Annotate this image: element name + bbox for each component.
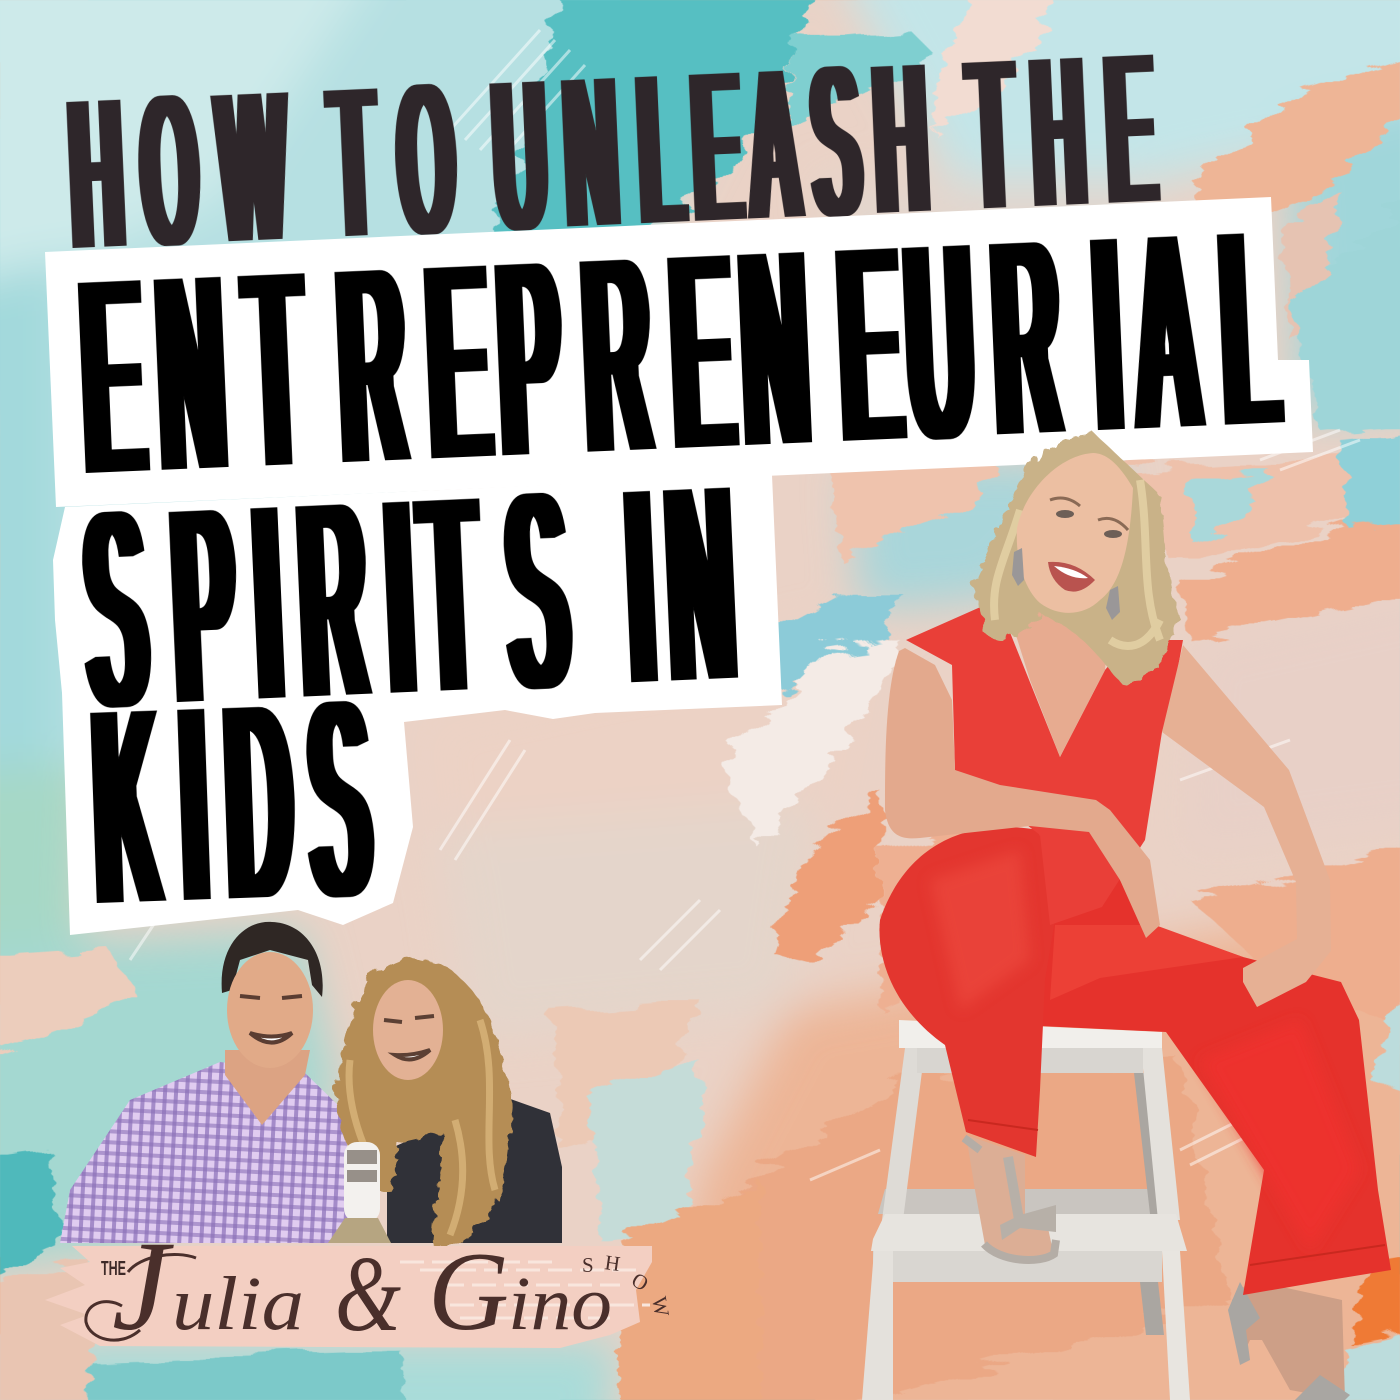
logo word: show: H xyxy=(603,1250,622,1276)
facial features xyxy=(1012,498,1128,620)
title line: how to unleash the: HOW TO UNLEASH THE xyxy=(65,3,1160,300)
red jumpsuit top xyxy=(906,605,1183,925)
logo flourish xyxy=(86,1254,196,1340)
logo word: julia: J xyxy=(112,1215,174,1357)
woman features xyxy=(384,1016,434,1059)
logo word: ampersand: & xyxy=(335,1235,401,1354)
logo word: the: THE xyxy=(101,1258,126,1280)
woman sweater xyxy=(387,1097,562,1243)
icon: microphone xyxy=(328,1142,391,1243)
logo word: show: O xyxy=(628,1268,653,1296)
logo word: gino: ino xyxy=(508,1262,612,1346)
red jumpsuit legs xyxy=(879,827,1391,1295)
left arm xyxy=(885,648,1160,938)
shoes xyxy=(964,1135,1350,1400)
logo word: gino: G xyxy=(428,1230,509,1354)
icon: white step stool xyxy=(862,1020,1190,1400)
logo word: show xyxy=(582,1250,674,1319)
blonde hair xyxy=(970,432,1177,682)
chest xyxy=(1005,600,1110,757)
logo word: julia: ulia xyxy=(172,1262,304,1346)
man shirt xyxy=(60,1062,350,1243)
white label: entrepreneurial xyxy=(45,197,1313,507)
title line: spirits in: SPIRITS IN xyxy=(79,419,740,773)
show logo xyxy=(45,1215,674,1357)
title line: entrepreneurial: ENTREPRENEURIAL xyxy=(76,164,1284,540)
guest: woman in red jumpsuit on stool xyxy=(862,432,1391,1400)
logo brush streaks xyxy=(400,1262,650,1318)
title line: kids: KIDS xyxy=(89,635,375,970)
right arm xyxy=(1162,645,1331,1007)
white label: spirits in and kids xyxy=(53,475,782,935)
man features xyxy=(240,996,302,1042)
face xyxy=(1017,453,1133,613)
man face xyxy=(227,952,313,1068)
logo brush banner xyxy=(45,1246,652,1348)
logo word: show: S xyxy=(582,1253,594,1277)
hosts photo xyxy=(60,922,562,1243)
man neck xyxy=(225,1050,310,1125)
hair highlights xyxy=(994,480,1160,646)
woman face xyxy=(373,980,443,1080)
logo word: show: W xyxy=(647,1295,674,1319)
woman curly hair xyxy=(334,955,509,1243)
hair highlights xyxy=(349,1020,495,1235)
man hair xyxy=(222,922,323,997)
